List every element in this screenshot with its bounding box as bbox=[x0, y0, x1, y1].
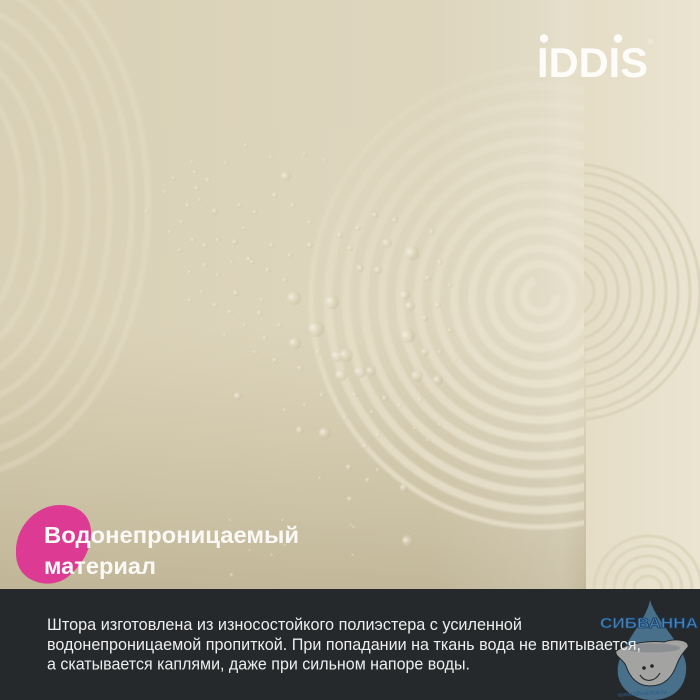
pattern: bottom right rings bbox=[594, 536, 700, 644]
heading: материал bbox=[44, 553, 156, 579]
pink blob bbox=[16, 505, 91, 584]
pattern: central spiral rings bbox=[310, 221, 584, 530]
pattern: left rings bbox=[0, 0, 148, 475]
logo: IDDIS: IDDIS bbox=[537, 39, 648, 86]
watermark: Sibvanna logo bbox=[600, 600, 698, 700]
watermark: Sibvanna logo: www.sibvanna.ru bbox=[617, 689, 668, 699]
description text: а скатывается каплями, даже при сильном напоре воды. bbox=[47, 656, 470, 674]
bottom panel bbox=[0, 589, 700, 700]
description text: Штора изготовлена из износостойкого полиэстера с усиленной bbox=[47, 616, 522, 634]
watermark: Sibvanna logo: СИБВАННА bbox=[600, 615, 698, 632]
description text: водонепроницаемой пропиткой. При попадании на ткань вода не впитывается, bbox=[47, 636, 641, 654]
pattern: right panel rings bbox=[584, 164, 700, 420]
heading: Водонепроницаемый bbox=[44, 522, 299, 548]
water droplets bbox=[144, 143, 457, 577]
logo: IDDIS: ® bbox=[648, 38, 654, 46]
